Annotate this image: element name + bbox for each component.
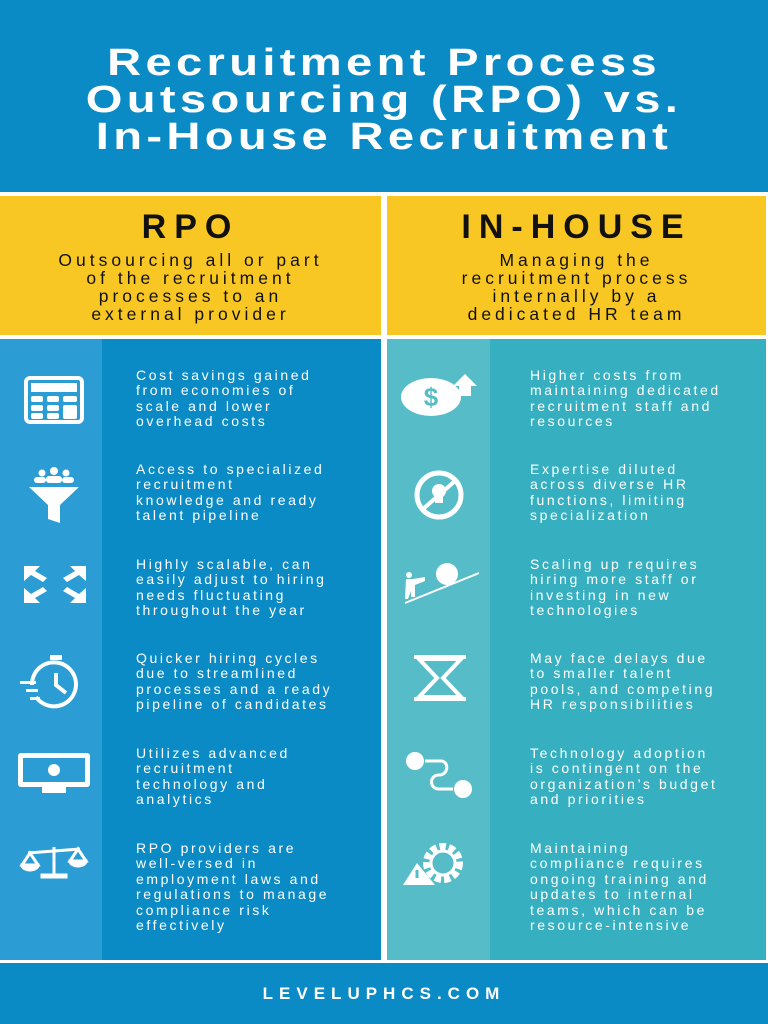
icon: winding path xyxy=(406,752,472,798)
text: quicker: due to streamlined xyxy=(136,665,298,681)
text: higher costs: recruitment staff and xyxy=(530,398,712,414)
text: cost savings: scale and lower xyxy=(136,398,272,414)
panel: RPO header: of the recruitment xyxy=(86,268,295,288)
text: compliance: compliance risk xyxy=(136,902,271,918)
panel: in-house column xyxy=(387,339,766,960)
text: maintaining compliance: updates to internal xyxy=(530,886,695,902)
icon: dollar up: $ xyxy=(424,382,439,412)
panel: RPO header: processes to an xyxy=(99,286,282,306)
text: scaling: technologies xyxy=(530,602,640,618)
icon: calculator xyxy=(24,376,84,424)
text: technology adoption: Technology adoption xyxy=(530,745,708,761)
text: technology adoption: organization’s budget xyxy=(530,776,717,792)
text: specialized: talent pipeline xyxy=(136,507,261,523)
text: specialized: knowledge and ready xyxy=(136,492,318,508)
text: expertise: Expertise diluted xyxy=(530,461,678,477)
panel: RPO header: external provider xyxy=(91,304,290,324)
text: expertise: across diverse HR xyxy=(530,476,689,492)
text: technology xyxy=(136,745,290,807)
text: expertise xyxy=(530,461,689,523)
title: In-House Recruitment xyxy=(96,116,672,158)
icon: monitor xyxy=(18,753,90,793)
text: scalable: needs fluctuating xyxy=(136,587,286,603)
text: scaling: Scaling up requires xyxy=(530,556,699,572)
text: delays xyxy=(530,650,715,712)
text: cost savings: from economies of xyxy=(136,382,295,398)
icon: gear warning xyxy=(403,843,463,885)
text: specialized xyxy=(136,461,324,523)
text: higher costs: Higher costs from xyxy=(530,367,684,383)
text: delays: pools, and competing xyxy=(530,681,715,697)
text: technology adoption: is contingent on the xyxy=(530,760,703,776)
icon: funnel xyxy=(29,467,79,523)
text: quicker: processes and a ready xyxy=(136,681,332,697)
text: cost savings: overhead costs xyxy=(136,413,267,429)
text: quicker: Quicker hiring cycles xyxy=(136,650,320,666)
icon: scales xyxy=(19,846,89,878)
text: compliance: employment laws and xyxy=(136,871,321,887)
text: maintaining compliance: resource-intensive xyxy=(530,917,691,933)
text: technology adoption xyxy=(530,745,717,807)
text: scalable: Highly scalable, can xyxy=(136,556,313,572)
text: maintaining compliance: Maintaining xyxy=(530,840,630,856)
panel: in-house header: IN-HOUSE xyxy=(461,208,692,246)
text: scaling: hiring more staff or xyxy=(530,571,698,587)
panel: RPO header: RPO xyxy=(142,208,239,246)
text: specialized: recruitment xyxy=(136,476,235,492)
text: technology: technology and xyxy=(136,776,267,792)
icon: hourglass xyxy=(414,655,466,701)
text: quicker: pipeline of candidates xyxy=(136,696,329,712)
icon: stopwatch xyxy=(20,655,78,708)
text: maintaining compliance xyxy=(530,840,709,933)
footer xyxy=(0,963,768,1024)
text: higher costs xyxy=(530,367,721,429)
text: compliance xyxy=(136,840,329,933)
panel: in-house header: dedicated HR team xyxy=(468,304,685,324)
text: maintaining compliance: teams, which can be xyxy=(530,902,707,918)
text: expertise: specialization xyxy=(530,507,650,523)
icon: dollar up xyxy=(401,374,477,416)
text: delays: May face delays due xyxy=(530,650,708,666)
text: scaling: investing in new xyxy=(530,587,671,603)
panel: RPO header xyxy=(0,196,381,335)
text: technology: Utilizes advanced xyxy=(136,745,290,761)
text: scalable xyxy=(136,556,327,618)
title: Recruitment Process xyxy=(107,42,661,84)
footer: LEVELUPHCS.COM xyxy=(263,984,505,1003)
text: quicker xyxy=(136,650,332,712)
text: technology: recruitment xyxy=(136,760,235,776)
icon: expand arrows xyxy=(24,566,86,603)
title: Outsourcing (RPO) vs. xyxy=(86,79,682,121)
panel: RPO column xyxy=(0,339,381,960)
text: higher costs: maintaining dedicated xyxy=(530,382,721,398)
text: compliance: RPO providers are xyxy=(136,840,296,856)
panel: in-house header: recruitment process xyxy=(462,268,691,288)
text: higher costs: resources xyxy=(530,413,615,429)
text: cost savings: Cost savings gained xyxy=(136,367,311,383)
text: compliance: regulations to manage xyxy=(136,886,329,902)
text: specialized: Access to specialized xyxy=(136,461,324,477)
panel: in-house header: internally by a xyxy=(492,286,660,306)
text: technology adoption: and priorities xyxy=(530,791,647,807)
text: maintaining compliance: ongoing training and xyxy=(530,871,709,887)
text: compliance: well-versed in xyxy=(136,855,258,871)
icon: push boulder xyxy=(404,563,479,604)
title xyxy=(0,0,768,192)
text: delays: to smaller talent xyxy=(530,665,673,681)
panel: RPO header: Outsourcing all or part xyxy=(58,250,323,270)
text: delays: HR responsibilities xyxy=(530,696,695,712)
text: compliance: effectively xyxy=(136,917,227,933)
panel: in-house header: Managing the xyxy=(499,250,654,270)
text: technology: analytics xyxy=(136,791,214,807)
panel: in-house header xyxy=(387,196,766,335)
icon: no idea xyxy=(414,470,464,520)
text: scalable: throughout the year xyxy=(136,602,307,618)
text: expertise: functions, limiting xyxy=(530,492,687,508)
text: maintaining compliance: compliance requires xyxy=(530,855,705,871)
text: scaling xyxy=(530,556,699,618)
text: scalable: easily adjust to hiring xyxy=(136,571,327,587)
text: cost savings xyxy=(136,367,311,429)
